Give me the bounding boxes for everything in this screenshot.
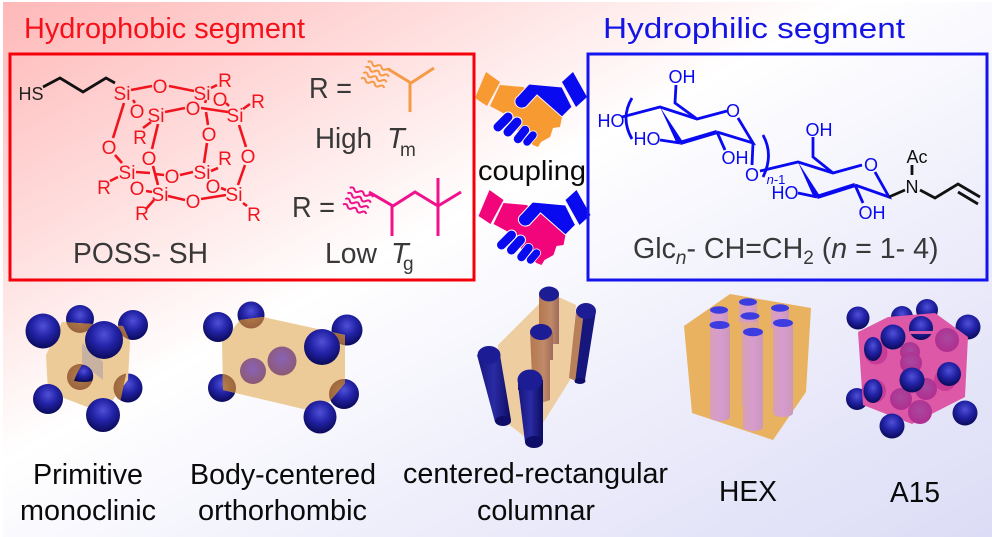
POSS-SH structure: R [218, 71, 232, 92]
label: Glcn-CH=CH2: ( [814, 233, 832, 265]
POSS-SH structure: HS [18, 84, 44, 104]
label: centered-rectangular columnar: columnar [477, 495, 595, 527]
POSS-SH structure: O [206, 177, 220, 198]
label: High Tm: High [315, 123, 372, 155]
POSS-SH structure: O [186, 192, 200, 213]
label: centered-rectangular columnar [403, 458, 668, 527]
label: High Tm: m [400, 140, 416, 161]
structure: centered-rectangular columnar [477, 286, 596, 448]
structure: primitive monoclinic [26, 305, 148, 432]
POSS-SH structure: O [130, 102, 144, 123]
POSS-SH structure: Si [119, 163, 135, 184]
panel: hydrophilic Glc [588, 54, 987, 280]
POSS-SH structure: Si [114, 84, 130, 105]
POSS-SH structure: O [130, 179, 144, 200]
label: body-centered orthorhombic: Body-centered [190, 459, 376, 491]
POSS-SH structure: R [251, 92, 265, 113]
POSS-SH structure: O [165, 167, 179, 188]
label: Glcn-CH=CH2: 2 [803, 248, 814, 269]
POSS-SH structure: R [218, 149, 232, 170]
POSS-SH structure: O [186, 99, 200, 120]
icon: pink and blue handshake [478, 190, 590, 265]
glucose chain structure: O [864, 155, 878, 175]
label: A15: A15 [890, 477, 940, 509]
structure: HEX cylinders [684, 294, 811, 440]
label: Glcn-CH=CH2: n [676, 248, 686, 269]
glucose chain structure [598, 67, 980, 223]
POSS-SH structure: Si [194, 84, 210, 105]
panel: hydrophobic POSS [10, 54, 474, 280]
heading: hydrophilic segment: Hydrophilic segment [603, 13, 905, 45]
label: Glcn-CH=CH2: Glc [633, 233, 676, 265]
label: Low Tg: g [403, 254, 414, 275]
POSS-SH structure: O [202, 125, 216, 146]
label: HEX: HEX [719, 476, 777, 508]
label: centered-rectangular columnar: centered-rectangular [403, 458, 668, 490]
POSS-SH structure: Si [148, 106, 164, 127]
POSS-SH structure: R [247, 205, 261, 226]
structure: body-centered orthorhombic [203, 302, 362, 434]
glucose chain structure: n-1 [767, 172, 785, 187]
R group: low Tg: R = [292, 192, 335, 224]
label: High Tm: T [387, 123, 407, 155]
POSS-SH structure: O [241, 147, 255, 168]
POSS-SH structure: Si [194, 163, 210, 184]
POSS-SH structure: O [213, 90, 227, 111]
label: body-centered orthorhombic: orthorhombic [198, 495, 367, 527]
label: Low Tg [325, 238, 414, 275]
label: primitive monoclinic: Primitive [33, 459, 143, 491]
POSS-SH structure: O [102, 138, 116, 159]
POSS-SH structure: R [97, 178, 111, 199]
POSS-SH structure: Si [152, 185, 168, 206]
label: Low Tg: T [391, 238, 411, 270]
glucose chain structure: OH [858, 203, 886, 223]
glucose chain structure: OH [722, 148, 748, 168]
label: Glcn-CH=CH2: - CH=CH [686, 233, 803, 265]
POSS-SH structure: R [133, 128, 147, 149]
POSS-SH structure: O [153, 77, 167, 98]
POSS-SH structure [18, 71, 265, 226]
structure: A15 [846, 299, 980, 438]
R group: isobutyl, high Tm [309, 60, 434, 112]
glucose chain structure: O [745, 165, 759, 185]
label: primitive monoclinic [20, 459, 156, 527]
glucose chain structure: Ac [906, 147, 928, 167]
glucose chain structure: N [906, 177, 918, 197]
glucose chain structure: HO [772, 183, 798, 203]
glucose chain structure: OH [806, 120, 832, 140]
glucose chain structure: OH [668, 67, 696, 87]
glucose chain structure: HO [598, 111, 624, 131]
POSS-SH structure: O [142, 149, 156, 170]
glucose chain structure: HO [634, 129, 660, 149]
label: coupling: coupling [478, 155, 586, 186]
label: primitive monoclinic: monoclinic [20, 495, 156, 527]
POSS-SH structure: Si [227, 106, 243, 127]
R group: isobutyl, high Tm: R = [309, 73, 352, 105]
label: Low Tg: Low [325, 238, 378, 270]
label: High Tm [315, 123, 416, 161]
heading: hydrophobic segment: Hydrophobic segment [24, 13, 305, 45]
label: Glcn-CH=CH2: n = 1- 4) [831, 233, 939, 265]
R group: low Tg [292, 178, 461, 236]
POSS-SH structure: Si [226, 185, 242, 206]
POSS-SH structure: R [135, 204, 149, 225]
icon: orange and blue handshake [475, 72, 587, 147]
label: body-centered orthorhombic [190, 459, 376, 527]
glucose chain structure: O [726, 101, 740, 121]
label: POSS-SH: POSS- SH [73, 238, 208, 270]
